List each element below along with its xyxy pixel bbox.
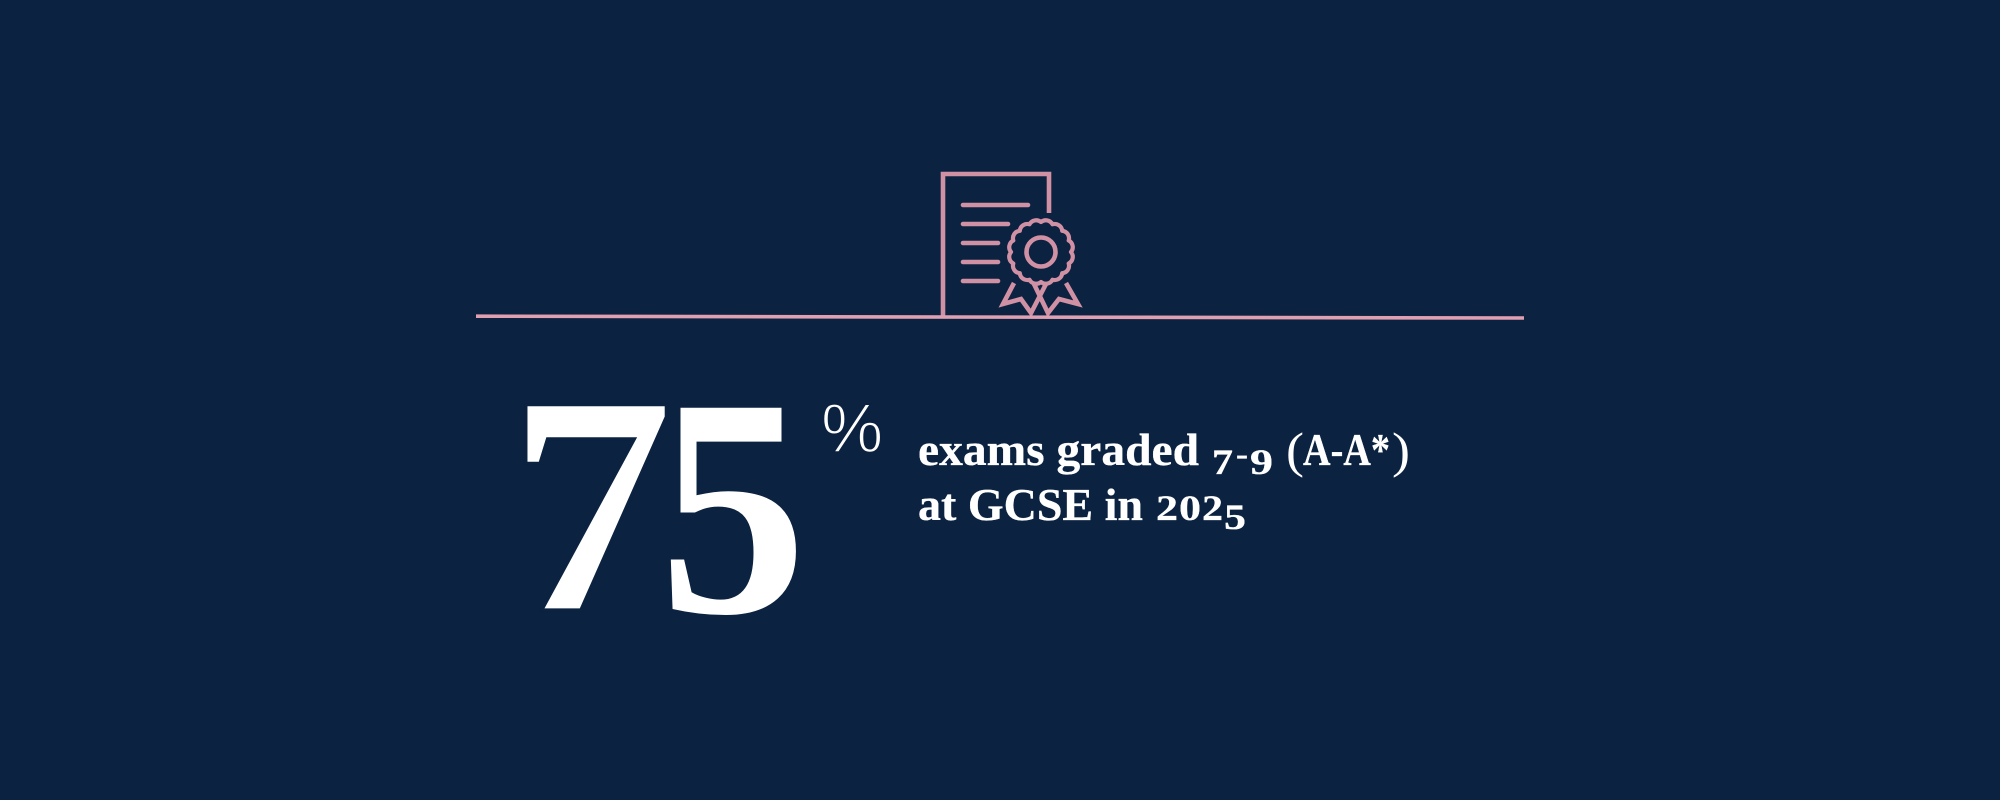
caption line 1: ) [1392, 422, 1410, 478]
percent sign: % [821, 389, 883, 467]
icon: document text lines [963, 205, 1028, 281]
icon: document outline [943, 174, 1049, 317]
digit 5: 5 [659, 334, 807, 680]
caption line 2: at GCSE in [918, 480, 1143, 530]
icon: rosette ribbons [1003, 283, 1078, 313]
icon: certificate with rosette [943, 174, 1078, 317]
caption line 1: - [1236, 436, 1248, 473]
caption line 1: 7 [1212, 442, 1233, 482]
caption line 1: 9 [1250, 442, 1273, 482]
caption line 1: A-A* [1303, 425, 1390, 475]
caption line 2: 0 [1179, 488, 1201, 528]
icon: rosette seal [1009, 220, 1073, 284]
caption line 1: ( [1286, 422, 1304, 478]
caption line 2: 2 [1156, 488, 1178, 528]
big number 75 [507, 331, 807, 680]
caption [918, 422, 1410, 537]
horizontal rule [476, 316, 1524, 318]
digit 7: 7 [507, 331, 675, 678]
caption line 2: 5 [1224, 497, 1246, 537]
caption line 2: 2 [1202, 488, 1223, 528]
caption line 1: exams graded [918, 425, 1199, 475]
